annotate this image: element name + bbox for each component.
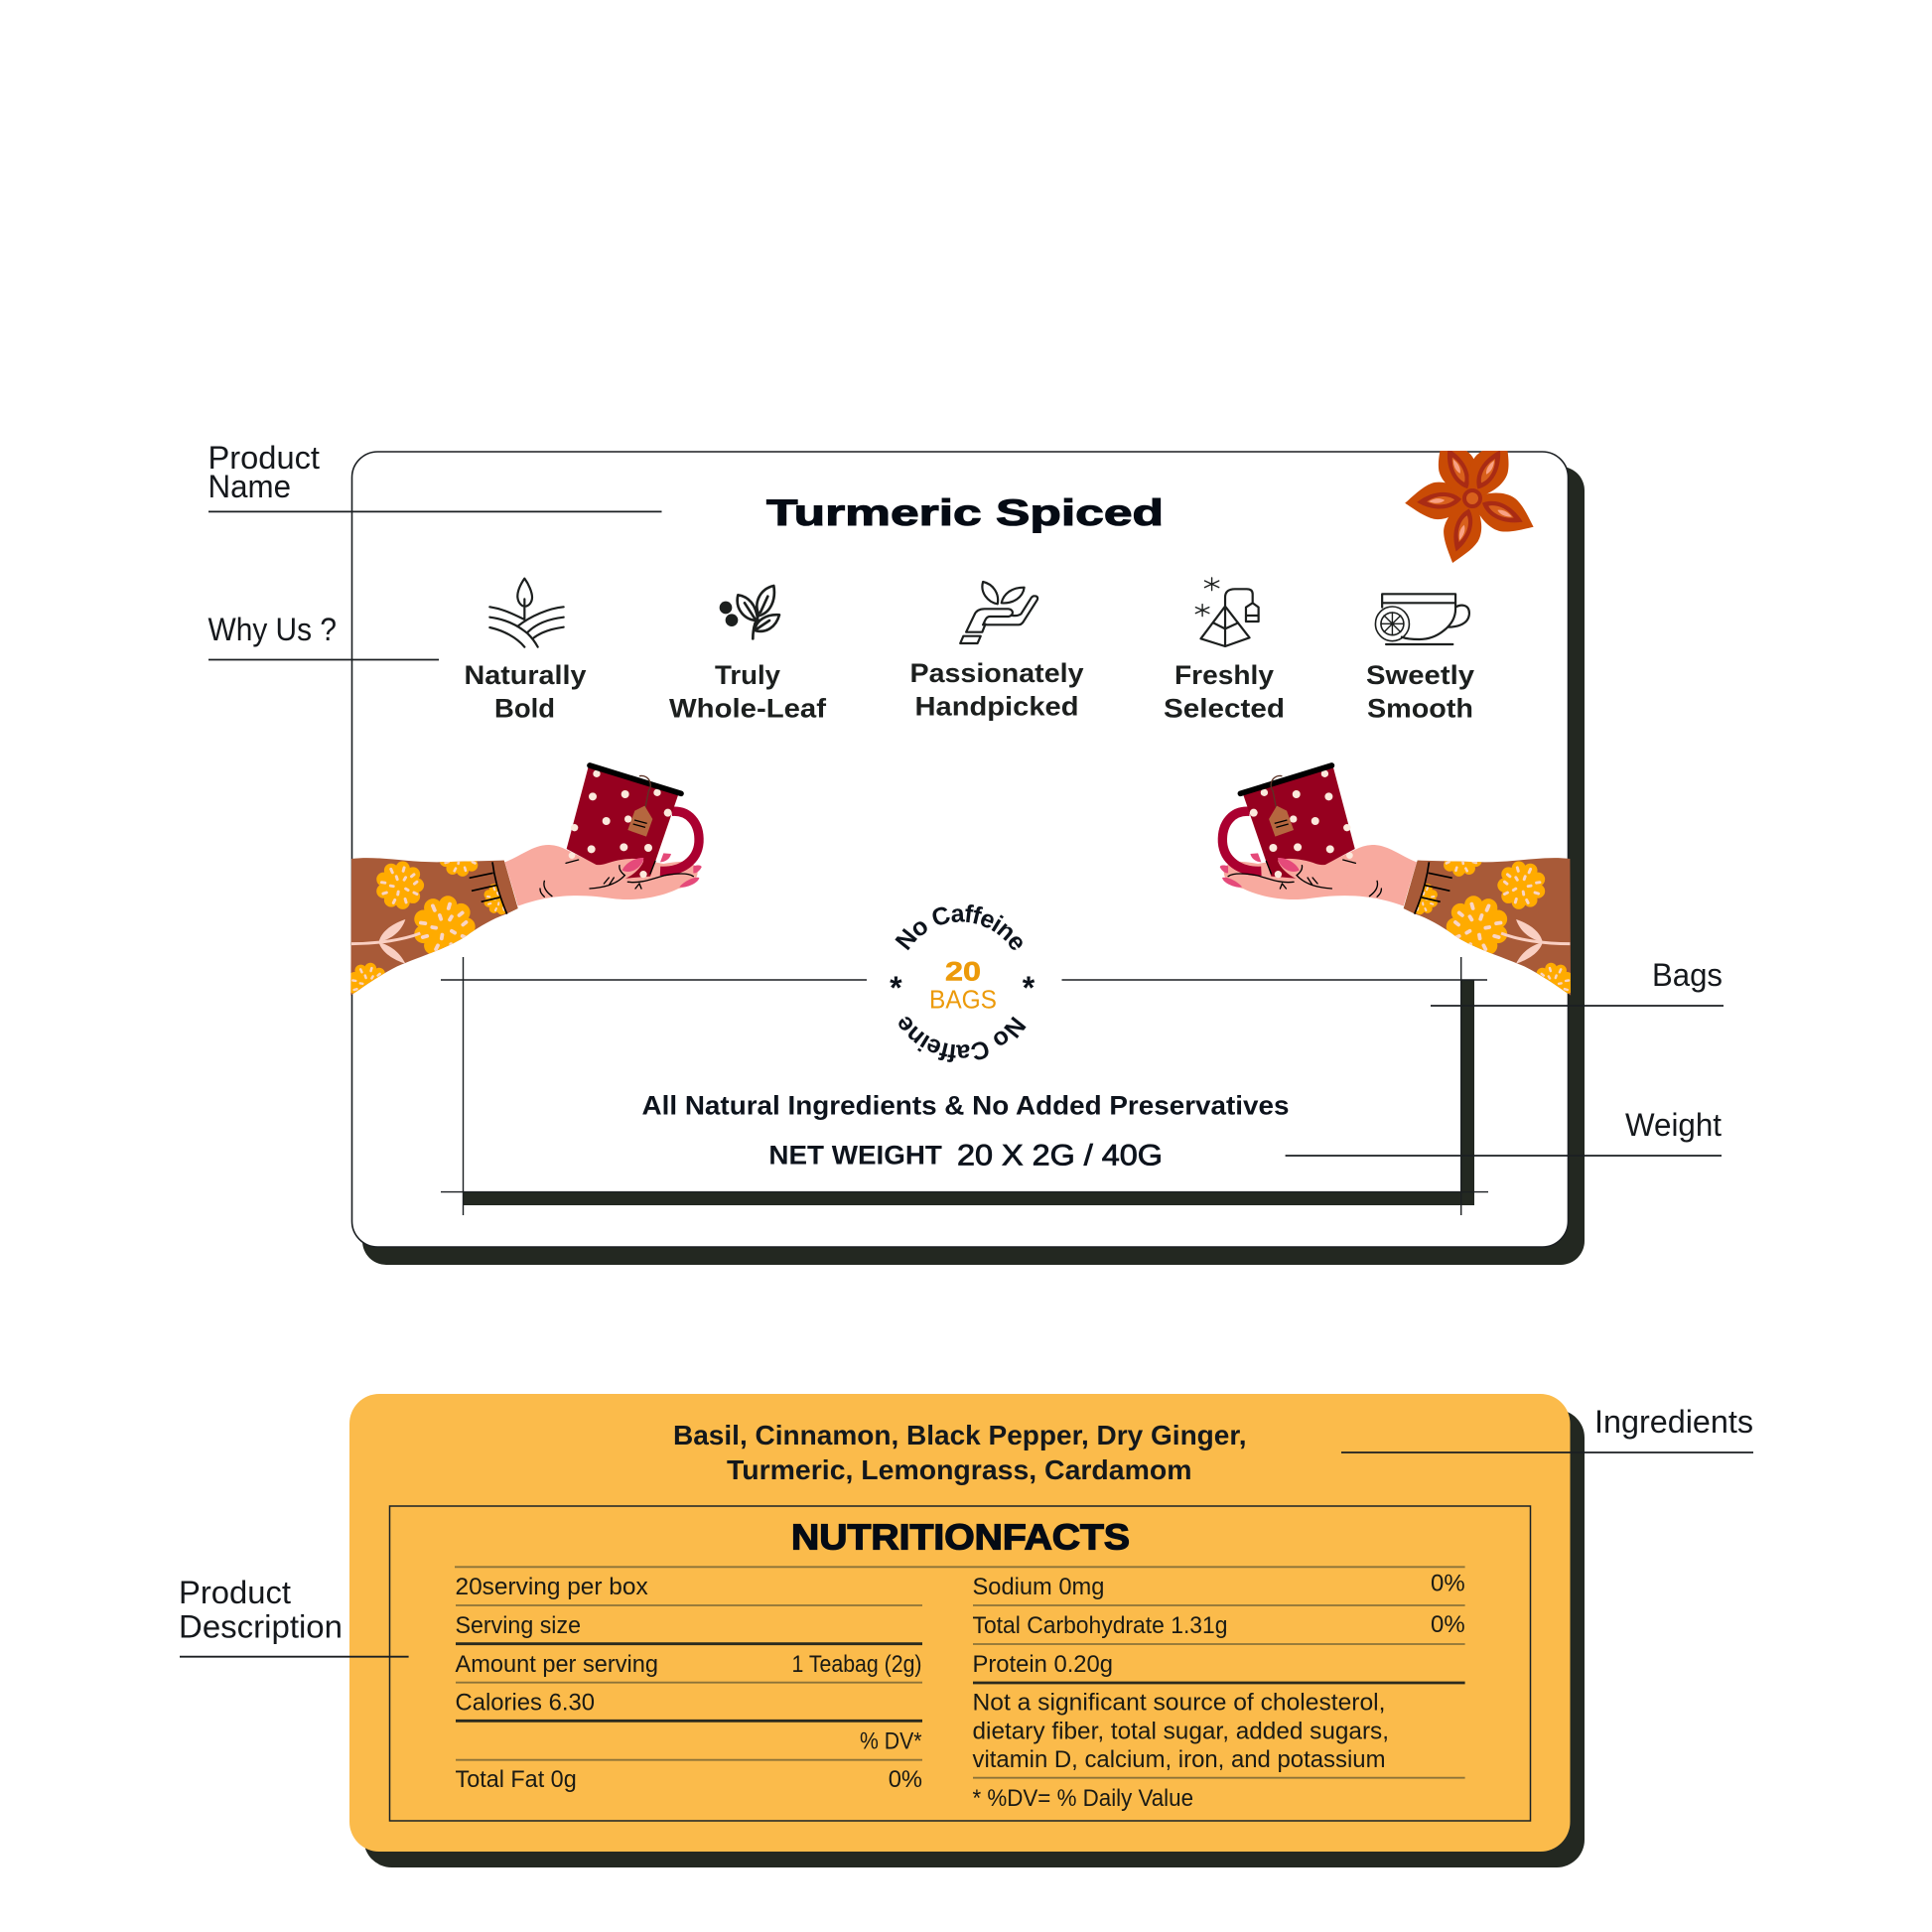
- callout: product name: Product: [208, 440, 320, 476]
- table: right column: vitamin D, calcium, iron, and potassium: [973, 1746, 1386, 1773]
- table: left column: 0%: [889, 1766, 922, 1793]
- text: Sweetly Smooth: [1366, 660, 1474, 723]
- callout: product name: [208, 440, 661, 511]
- callout: product description: Description: [179, 1608, 343, 1644]
- table: right column: [973, 1571, 1465, 1812]
- text: Truly Whole-Leaf: Whole-Leaf: [669, 693, 827, 723]
- table: right column: Protein 0.20g: [973, 1651, 1113, 1678]
- crop frame: thin lines: [441, 957, 1488, 1215]
- callout: why us: Why Us ?: [208, 612, 337, 647]
- illustration: left hand holding mug: [348, 765, 702, 1003]
- badge star right: *: [1023, 970, 1035, 1006]
- text: Freshly Selected: Selected: [1164, 693, 1285, 723]
- ingredients text: Turmeric, Lemongrass, Cardamom: [727, 1454, 1191, 1485]
- icon: plant on hills: [489, 579, 564, 647]
- table: left column: Amount per serving: [455, 1651, 658, 1678]
- text: Naturally Bold: Bold: [494, 693, 555, 723]
- badge: 20 bags no caffeine: [890, 904, 1035, 1062]
- ingredients text: Basil, Cinnamon, Black Pepper, Dry Ginger,: [673, 1420, 1247, 1450]
- table rules: [455, 1567, 1465, 1778]
- text: Sweetly Smooth: Smooth: [1367, 693, 1473, 723]
- badge count: 20: [945, 957, 981, 987]
- text: Passionately Handpicked: Passionately: [909, 658, 1084, 688]
- text: Truly Whole-Leaf: Truly: [715, 660, 780, 690]
- text: Naturally Bold: [465, 660, 586, 723]
- table: left column: Calories 6.30: [455, 1690, 595, 1717]
- text: Freshly Selected: [1164, 660, 1285, 723]
- callout: product description: [179, 1575, 409, 1657]
- icon: star anise: [1405, 451, 1534, 563]
- badge star left: *: [890, 970, 902, 1006]
- table: left column: % DV*: [860, 1728, 921, 1755]
- icon: hand with leaves: [960, 582, 1037, 643]
- net weight: NET WEIGHT: [768, 1141, 942, 1171]
- illustration: right hand holding mug: [1220, 765, 1573, 1003]
- net weight: 20 X 2G / 40G: [957, 1139, 1163, 1172]
- front label card: [351, 452, 1569, 1247]
- icon: leaf sprig with berries: [720, 586, 779, 638]
- panel: front label: [350, 451, 1585, 1265]
- badge arc text top: No Caffeine: [895, 904, 1023, 951]
- table: right column: dietary fiber, total sugar, added sugars,: [973, 1719, 1389, 1745]
- table: right column: 0%: [1431, 1611, 1465, 1638]
- nutrition label shadow: [363, 1410, 1585, 1867]
- nutrition facts heading: NUTRITIONFACTS: [791, 1517, 1130, 1558]
- text: Truly Whole-Leaf: [669, 660, 827, 723]
- front label shadow: [362, 467, 1585, 1265]
- icon: tea cup with lemon: [1375, 594, 1469, 644]
- table: right column: Total Carbohydrate 1.31g: [973, 1612, 1227, 1639]
- callout: weight: Weight: [1625, 1107, 1722, 1143]
- table: left column: Total Fat 0g: [455, 1766, 577, 1793]
- ingredients text: [673, 1420, 1247, 1485]
- table: left column: 20serving per box: [455, 1574, 648, 1600]
- table: left column: 1 Teabag (2g): [792, 1651, 921, 1678]
- table: right column: Not a significant source of cholesterol,: [973, 1690, 1386, 1717]
- text: Passionately Handpicked: [909, 658, 1084, 721]
- text: Passionately Handpicked: Handpicked: [915, 691, 1078, 721]
- callout: product description: Product: [179, 1575, 291, 1610]
- crop frame: thick bars: [463, 980, 1474, 1205]
- icon: pyramid tea bag: [1195, 578, 1259, 646]
- table: right column: * %DV= % Daily Value: [973, 1785, 1193, 1812]
- text: Naturally Bold: Naturally: [465, 660, 586, 690]
- badge arc text bottom: No Caffeine: [898, 1017, 1027, 1062]
- table: right column: Sodium 0mg: [973, 1574, 1104, 1600]
- net weight: [768, 1139, 1163, 1172]
- callout: bags: Bags: [1652, 957, 1723, 993]
- nutrition label card: [349, 1394, 1571, 1852]
- claim text: All Natural Ingredients & No Added Preservatives: [641, 1090, 1289, 1120]
- table: left column: Serving size: [455, 1612, 581, 1639]
- table: right column: 0%: [1431, 1571, 1465, 1597]
- callout: ingredients: Ingredients: [1594, 1404, 1753, 1440]
- text: Sweetly Smooth: Sweetly: [1366, 660, 1474, 690]
- panel: nutrition label: [349, 1394, 1585, 1867]
- callout: product name: Name: [208, 469, 291, 504]
- table: left column: [455, 1574, 922, 1793]
- title: Turmeric Spiced: [766, 491, 1164, 533]
- text: Freshly Selected: Freshly: [1174, 660, 1274, 690]
- badge unit: BAGS: [929, 987, 997, 1015]
- nutrition facts box: [389, 1506, 1531, 1821]
